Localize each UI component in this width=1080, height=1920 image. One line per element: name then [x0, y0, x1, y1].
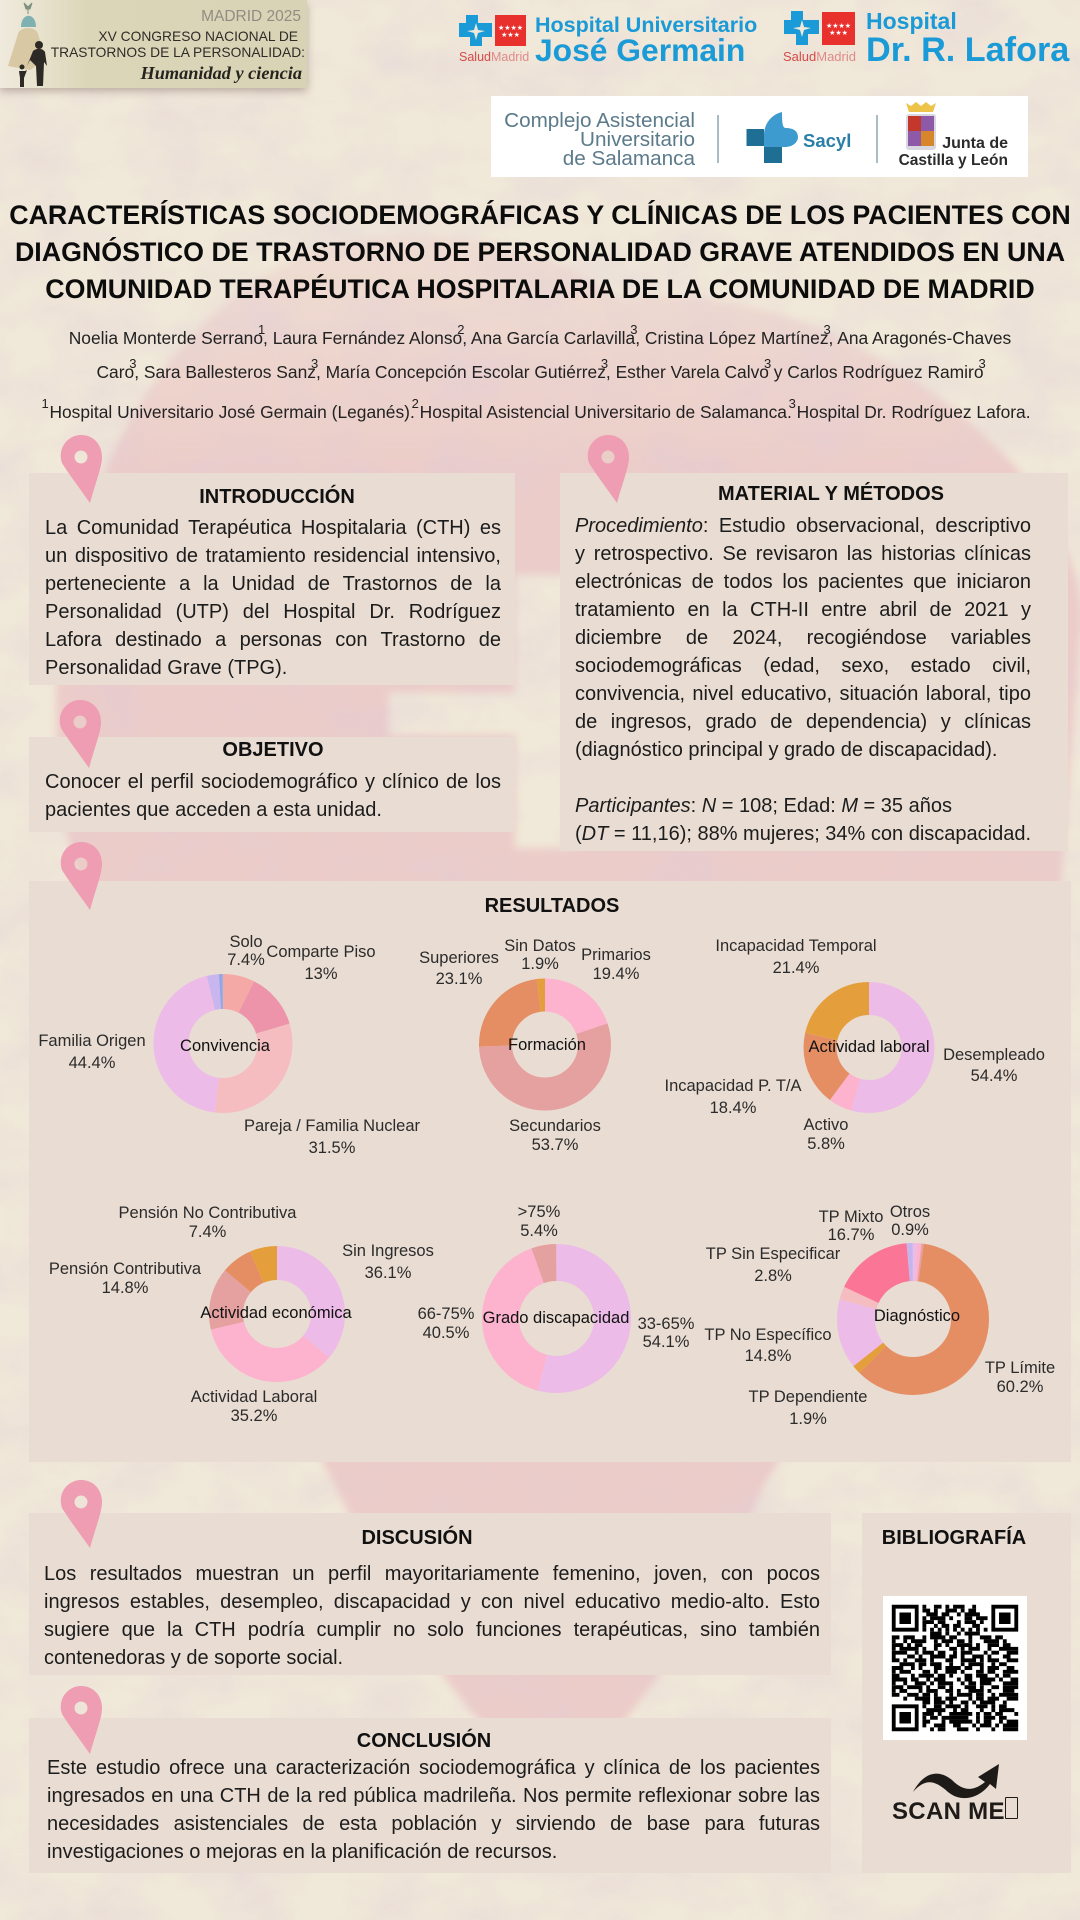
authors: 3: [129, 356, 136, 371]
donut chart: diagnóstico: [704, 1203, 1055, 1428]
donut chart: diagnóstico: Diagnóstico: [874, 1307, 960, 1325]
panel: discusión: [29, 1513, 831, 1675]
donut chart: grado de discapacidad: 54.1%: [643, 1333, 690, 1351]
text: objetivo: [45, 771, 501, 821]
heading: conclusión: CONCLUSIÓN: [357, 1730, 491, 1752]
text: procedimiento: Procedimiento: Estudio observacional, descriptivo: [575, 515, 1031, 537]
text: introducción: [45, 517, 501, 679]
donut chart: actividad laboral: 18.4%: [710, 1099, 757, 1117]
title: [9, 200, 1071, 304]
donut chart: diagnóstico: TP No Específico: [704, 1326, 832, 1344]
text: conclusión: [47, 1757, 820, 1863]
donut chart: actividad económica: 7.4%: [189, 1223, 227, 1241]
title: DIAGNÓSTICO DE TRASTORNO DE PERSONALIDAD GRAVE ATENDIDOS EN UNA: [15, 237, 1065, 267]
text: procedimiento: [575, 515, 1031, 761]
panel: material y métodos: [560, 473, 1068, 851]
donut chart: formación: Sin Datos: [504, 937, 576, 955]
text: discusión: Los resultados muestran un perfil mayoritariamente femenino, joven, con pocos: [44, 1563, 820, 1585]
text: procedimiento: y retrospectivo. Se revisaron las historias clínicas: [575, 543, 1031, 565]
text: participantes: Participantes: N = 108; Edad: M = 35 años: [575, 795, 952, 817]
text: procedimiento: electrónicas de todos los pacientes que iniciaron: [575, 571, 1031, 593]
heading: material y métodos: MATERIAL Y MÉTODOS: [718, 483, 944, 505]
heading: introducción: INTRODUCCIÓN: [199, 486, 355, 508]
text: scan me: SCAN ME: [892, 1798, 1005, 1825]
heading: objetivo: OBJETIVO: [222, 739, 324, 761]
donut chart: diagnóstico: TP Sin Especificar: [706, 1245, 841, 1263]
donut chart: actividad económica: Pensión Contributiva: [49, 1260, 202, 1278]
donut chart: formación: 19.4%: [593, 965, 640, 983]
logo: Hospital Dr. R. Lafora: [783, 8, 1070, 67]
text: discusión: ingresos estables, desempleo, discapacidad y con nivel educativo medio-alto. Esto: [44, 1591, 820, 1613]
text: introducción: un dispositivo de tratamiento residencial intensivo,: [45, 545, 501, 567]
logos box: Complejo Asistencial, Sacyl, Junta de Castilla y León: Castilla y León: [899, 152, 1008, 169]
authors: 3: [978, 356, 986, 371]
text: procedimiento: (diagnóstico principal y grado de discapacidad).: [575, 739, 997, 761]
donut chart: actividad económica: [49, 1204, 434, 1425]
donut chart: actividad económica: Actividad Laboral: [191, 1388, 317, 1406]
authors: 3: [630, 322, 637, 337]
banner text: [51, 8, 305, 83]
affiliations: 1: [41, 396, 49, 411]
text: conclusión: necesidades asistenciales de esta población y sirviendo de base para futuras: [47, 1813, 820, 1835]
donut chart: actividad laboral: Incapacidad P. T/A: [664, 1077, 802, 1095]
authors: 3: [601, 356, 608, 371]
heading: discusión: DISCUSIÓN: [361, 1527, 473, 1549]
donut chart: formación: [419, 937, 651, 1154]
donut chart: formación: Formación: [508, 1036, 586, 1054]
banner text: XV CONGRESO NACIONAL DE: [98, 29, 298, 44]
panel: objetivo: [29, 737, 515, 832]
donut chart: grado de discapacidad: [418, 1203, 695, 1374]
donut chart: convivencia: 44.4%: [69, 1054, 116, 1072]
donut chart: grado de discapacidad: 33-65%: [638, 1315, 695, 1333]
donut chart: diagnóstico: 60.2%: [997, 1378, 1044, 1396]
donut chart: actividad laboral: Incapacidad Temporal: [715, 937, 877, 955]
donut chart: diagnóstico: 16.7%: [828, 1226, 875, 1244]
donut chart: actividad económica: 35.2%: [231, 1407, 278, 1425]
authors: [69, 322, 1011, 382]
donut chart: actividad laboral: 54.4%: [971, 1067, 1018, 1085]
logo: Hospital Universitario José Germain: José Germain: [535, 32, 745, 67]
donut chart: actividad laboral: 5.8%: [807, 1135, 845, 1153]
donut chart: formación: Superiores: [419, 949, 499, 967]
icon: pin objetivo: [60, 700, 101, 768]
logo: Hospital Dr. R. Lafora: ★★★: [829, 29, 848, 37]
donut chart: convivencia: Convivencia: [180, 1037, 271, 1055]
donut chart: convivencia: Comparte Piso: [266, 943, 376, 961]
text: objetivo: pacientes que acceden a esta unidad.: [45, 799, 382, 821]
logo: Hospital Dr. R. Lafora: ★★★★: [826, 22, 851, 30]
donut chart: convivencia: 31.5%: [309, 1139, 356, 1157]
authors: 3: [824, 322, 831, 337]
donut chart: convivencia: Solo: [229, 933, 263, 951]
logo: Hospital Universitario José Germain: ★★★: [501, 31, 520, 39]
authors: Noelia Monterde Serrano, Laura Fernández Alonso, Ana García Carlavilla, Cristina López Martínez, Ana Aragonés-Chaves: [69, 328, 1011, 348]
text: introducción: perteneciente a la Unidad de Trastornos de la: [45, 573, 501, 595]
donut chart: formación: Secundarios: [509, 1117, 601, 1135]
donut chart: convivencia: 13%: [304, 965, 338, 983]
charts: resultados: [38, 933, 1055, 1428]
logos box: Complejo Asistencial, Sacyl, Junta de Castilla y León: Junta de: [942, 135, 1008, 152]
logo: Hospital Universitario José Germain: ★★★★: [498, 24, 523, 32]
authors: 3: [311, 356, 318, 371]
logos box: Complejo Asistencial, Sacyl, Junta de Castilla y León: [491, 96, 1028, 177]
donut chart: diagnóstico: 2.8%: [754, 1267, 792, 1285]
donut chart: actividad económica: Pensión No Contributiva: [119, 1204, 297, 1222]
icon: pin conclusión: [60, 1686, 102, 1754]
text: procedimiento: sociodemográficas (edad, sexo, estado civil,: [575, 655, 1031, 677]
text: procedimiento: convivencia, nivel educativo, situación laboral, tipo: [575, 683, 1031, 705]
affiliations: 2: [412, 396, 419, 411]
congress banner: [0, 0, 307, 88]
logos box: Complejo Asistencial, Sacyl, Junta de Castilla y León: Sacyl: [803, 130, 851, 151]
donut chart: actividad económica: 36.1%: [365, 1264, 412, 1282]
donut chart: grado de discapacidad: 40.5%: [423, 1324, 470, 1342]
logos box: Complejo Asistencial, Sacyl, Junta de Castilla y León: Complejo Asistencial: [504, 109, 695, 132]
donut chart: diagnóstico: Otros: [890, 1203, 930, 1221]
donut chart: diagnóstico: TP Mixto: [819, 1208, 883, 1226]
text: discusión: contenedoras y de soporte social.: [44, 1647, 343, 1669]
donut chart: actividad económica: Sin Ingresos: [342, 1242, 434, 1260]
banner text: TRASTORNOS DE LA PERSONALIDAD:: [51, 45, 305, 60]
logo: Hospital Dr. R. Lafora: Hospital: [866, 8, 957, 34]
title: CARACTERÍSTICAS SOCIODEMOGRÁFICAS Y CLÍNICAS DE LOS PACIENTES CON: [9, 200, 1071, 230]
text: participantes: (DT = 11,16); 88% mujeres; 34% con discapacidad.: [575, 823, 1031, 845]
text: introducción: La Comunidad Terapéutica Hospitalaria (CTH) es: [45, 517, 501, 539]
panel: bibliografía: [862, 1513, 1071, 1873]
icon: phone: [1005, 1797, 1018, 1819]
donut chart: formación: 23.1%: [436, 970, 483, 988]
donut chart: grado de discapacidad: 66-75%: [418, 1305, 475, 1323]
banner text: Humanidad y ciencia: [141, 63, 302, 83]
donut chart: grado de discapacidad: Grado discapacidad: [483, 1309, 629, 1327]
authors: 3: [764, 356, 771, 371]
donut chart: formación: 1.9%: [521, 955, 559, 973]
icon: pin material y métodos: [588, 435, 629, 503]
donut chart: actividad económica: Actividad económica: [200, 1304, 352, 1322]
donut chart: actividad laboral: 21.4%: [773, 959, 820, 977]
donut chart: diagnóstico: 1.9%: [789, 1410, 827, 1428]
text: introducción: Personalidad Grave (TPG).: [45, 657, 287, 679]
donut chart: actividad laboral: Desempleado: [943, 1046, 1045, 1064]
logos box: Complejo Asistencial, Sacyl, Junta de Castilla y León: de Salamanca: [563, 147, 695, 170]
donut chart: actividad económica: 14.8%: [102, 1279, 149, 1297]
donut chart: convivencia: [38, 933, 421, 1157]
logo: Hospital Universitario José Germain: Hospital Universitario: [535, 13, 757, 37]
donut chart: diagnóstico: 0.9%: [891, 1221, 929, 1239]
donut chart: formación: Primarios: [581, 946, 651, 964]
authors: 1: [258, 322, 265, 337]
authors: Caro, Sara Ballesteros Sanz, María Concepción Escolar Gutiérrez, Esther Varela Calvo y Carlos Rodríguez Ramiro: [96, 362, 984, 382]
donut chart: diagnóstico: TP Dependiente: [749, 1388, 867, 1406]
donut chart: diagnóstico: 14.8%: [745, 1347, 792, 1365]
icon: dome and figures: [8, 2, 47, 87]
icon: pin resultados: [60, 842, 102, 910]
text: introducción: Personalidad (UTP) del Hospital Dr. Rodríguez: [45, 601, 501, 623]
donut chart: convivencia: 7.4%: [227, 951, 265, 969]
donut chart: formación: 53.7%: [532, 1136, 579, 1154]
text: procedimiento: de ingresos, grado de dependencia) y clínicas: [575, 711, 1031, 733]
panel: conclusión: [29, 1718, 831, 1873]
heading: resultados: RESULTADOS: [485, 895, 619, 917]
icon: curved arrow: [913, 1764, 999, 1798]
text: objetivo: Conocer el perfil sociodemográfico y clínico de los: [45, 771, 501, 793]
donut chart: grado de discapacidad: 5.4%: [520, 1222, 558, 1240]
text: discusión: sugiere que la CTH podría cumplir no solo funciones terapéuticas, sino también: [44, 1619, 820, 1641]
donut chart: convivencia: Familia Origen: [38, 1032, 146, 1050]
title: COMUNIDAD TERAPÉUTICA HOSPITALARIA DE LA COMUNIDAD DE MADRID: [45, 274, 1035, 304]
logo: Hospital Universitario José Germain: [459, 13, 757, 67]
text: procedimiento: diciembre de 2024, recogiéndose variables: [575, 627, 1031, 649]
banner text: MADRID 2025: [201, 8, 301, 25]
QR code: [883, 1596, 1027, 1740]
donut chart: convivencia: Pareja / Familia Nuclear: [244, 1117, 421, 1135]
icon: pin introducción: [60, 435, 102, 503]
donut chart: actividad laboral: [664, 937, 1045, 1153]
text: conclusión: investigaciones o mejoras en la planificación de recursos.: [47, 1841, 557, 1863]
icon: pin discusión: [60, 1480, 102, 1548]
donut chart: actividad laboral: Actividad laboral: [808, 1038, 930, 1056]
panel: resultados: [29, 881, 1071, 1462]
text: discusión: [44, 1563, 820, 1669]
logos box: Complejo Asistencial, Sacyl, Junta de Castilla y León: Universitario: [580, 128, 695, 151]
text: conclusión: Este estudio ofrece una caracterización sociodemográfica y clínica de los pacientes: [47, 1757, 820, 1779]
heading: bibliografía: BIBLIOGRAFÍA: [882, 1527, 1026, 1549]
text: participantes: [575, 795, 1031, 845]
authors: 2: [457, 322, 464, 337]
donut chart: actividad laboral: Activo: [804, 1116, 848, 1134]
donut chart: diagnóstico: TP Límite: [985, 1359, 1055, 1377]
affiliations: 3: [789, 396, 796, 411]
text: introducción: Lafora destinado a personas con Trastorno de: [45, 629, 501, 651]
logo: Hospital Universitario José Germain: SaludMadrid: [459, 50, 529, 64]
affiliations: Hospital Universitario José Germain (Leganés). Hospital Asistencial Universitario de Salamanca. Hospital Dr. Rodríguez Lafora.: [49, 402, 1031, 422]
donut chart: grado de discapacidad: >75%: [518, 1203, 561, 1221]
logo: Hospital Dr. R. Lafora: SaludMadrid: [783, 49, 856, 64]
text: conclusión: ingresados en una CTH de la red pública madrileña. Nos permite reflexionar sobre las: [47, 1785, 820, 1807]
panel: introducción: [29, 473, 515, 685]
text: procedimiento: tratamiento en la CTH-II entre abril de 2021 y: [575, 599, 1031, 621]
